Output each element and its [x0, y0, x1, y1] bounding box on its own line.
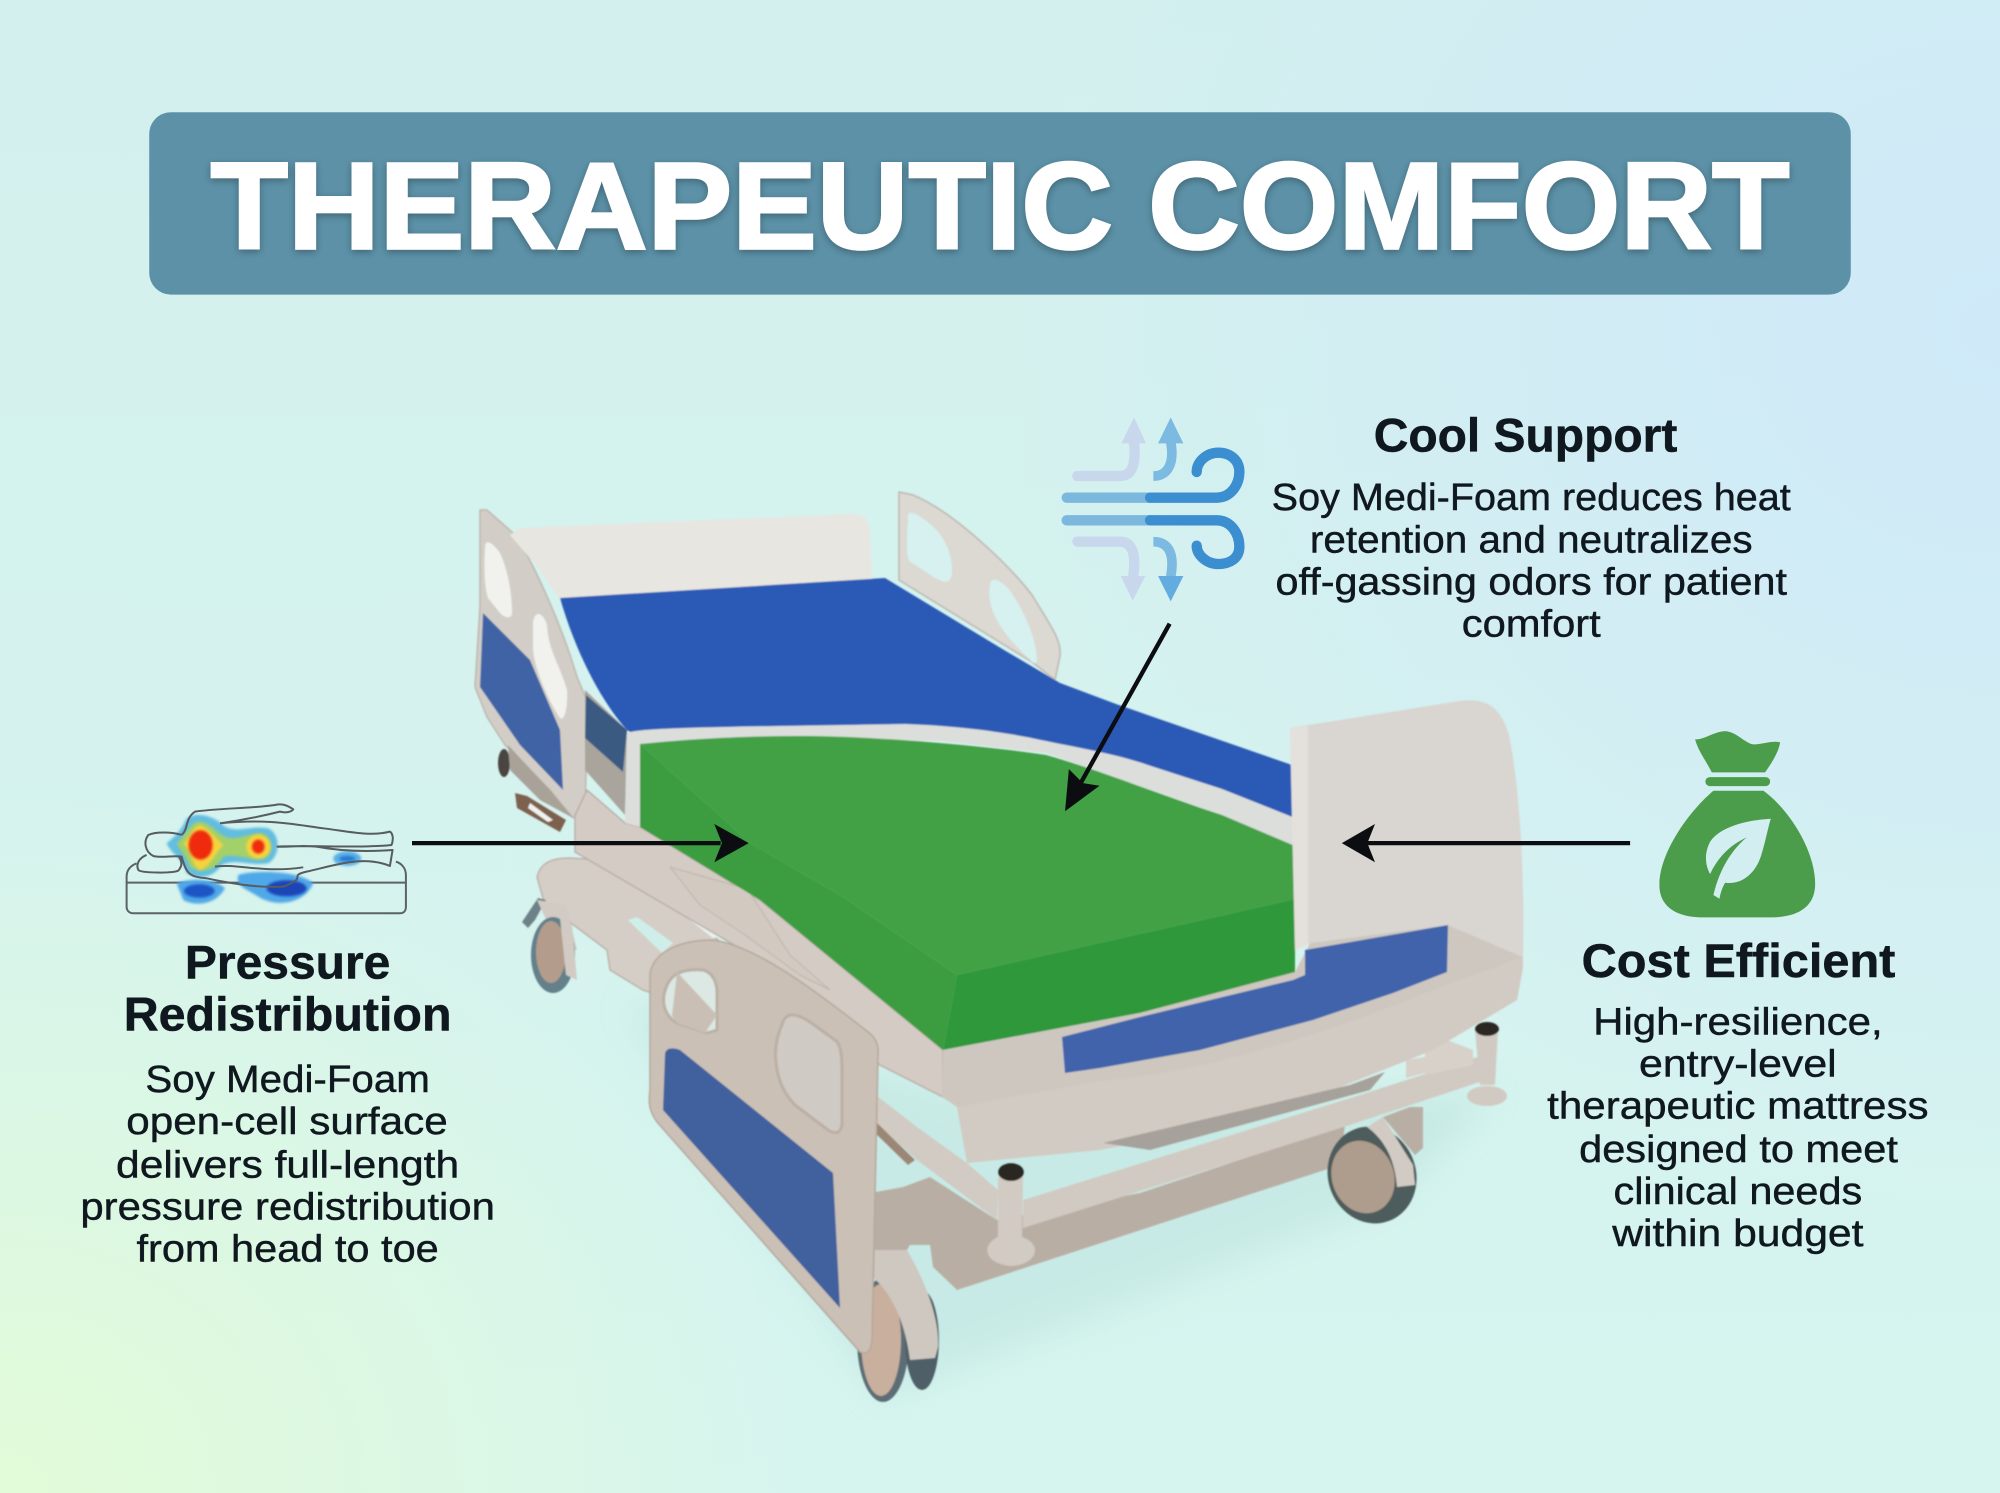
near foot-side rail	[649, 940, 878, 1353]
icon: body pressure heat map on mattress	[127, 804, 406, 913]
callout: cost efficient: Cost Efficient	[1582, 935, 1896, 988]
callout: pressure redistribution: Redistribution	[124, 989, 452, 1042]
callout: pressure redistribution: pressure redistribution	[80, 1185, 495, 1228]
leaf	[1706, 819, 1771, 899]
callout: cost efficient: therapeutic mattress	[1547, 1085, 1929, 1128]
right post assembly	[1406, 1022, 1507, 1106]
title banner: THERAPEUTIC COMFORT	[210, 138, 1790, 276]
callout: pressure redistribution: Pressure	[185, 936, 390, 989]
rear left castor	[531, 900, 577, 993]
arrow to foot board: cost efficient	[1342, 824, 1630, 862]
body outline	[145, 804, 393, 887]
callout: cool support: comfort	[1462, 602, 1601, 645]
callout: pressure redistribution	[80, 936, 495, 1270]
folded frame wedge	[670, 867, 830, 990]
callout: cool support: retention and neutralizes	[1310, 518, 1753, 561]
callout: cool support: Cool Support	[1374, 410, 1678, 463]
callout: pressure redistribution: delivers full-length	[116, 1143, 459, 1186]
callout: pressure redistribution: from head to toe	[136, 1227, 439, 1270]
callout: cost efficient: within budget	[1611, 1212, 1864, 1255]
foot end cream body	[942, 925, 1523, 1163]
callout: cool support: Soy Medi-Foam reduces heat	[1272, 476, 1791, 519]
callout: cost efficient: entry-level	[1639, 1043, 1837, 1086]
mattress outline	[127, 862, 406, 913]
blue mattress cover	[560, 578, 1297, 825]
rear headboard	[510, 514, 872, 600]
center post	[987, 1163, 1035, 1266]
callout: cool support	[1272, 410, 1791, 645]
callout: pressure redistribution: open-cell surface	[126, 1100, 448, 1143]
bed floor shadow	[620, 1000, 1500, 1400]
callout: cost efficient: clinical needs	[1614, 1170, 1862, 1213]
foam cut band	[625, 724, 1295, 850]
callout: cool support: off-gassing odors for patient	[1276, 560, 1787, 603]
side frame under mattress	[575, 790, 943, 1097]
callout: cost efficient: High-resilience,	[1593, 1000, 1883, 1043]
right leg and castor	[1314, 1107, 1430, 1236]
icon: cooling air flow	[1067, 417, 1239, 601]
rear left brown handle and mechanism	[498, 745, 573, 832]
far right side rail	[899, 492, 1060, 680]
callout: cost efficient: designed to meet	[1579, 1128, 1898, 1171]
green foam core	[640, 736, 1295, 1050]
pressure heat spots	[167, 815, 361, 904]
bumper underside shadow	[1103, 1072, 1385, 1150]
title banner	[149, 112, 1851, 295]
lower chassis base	[870, 1053, 1495, 1290]
foot board panel	[1290, 700, 1523, 957]
far left side rail	[475, 510, 588, 818]
icon: money bag with leaf	[1659, 731, 1815, 917]
arrow to foam: pressure redistribution	[412, 824, 749, 862]
front castor	[857, 1250, 939, 1402]
arrow to foam: cool support	[1065, 624, 1170, 811]
callout: pressure redistribution: Soy Medi-Foam	[145, 1058, 430, 1101]
callout: cost efficient	[1547, 935, 1929, 1255]
hospital bed with cut-away mattress	[475, 492, 1523, 1402]
rear base frame	[522, 858, 760, 1000]
pillow outline	[137, 855, 181, 873]
